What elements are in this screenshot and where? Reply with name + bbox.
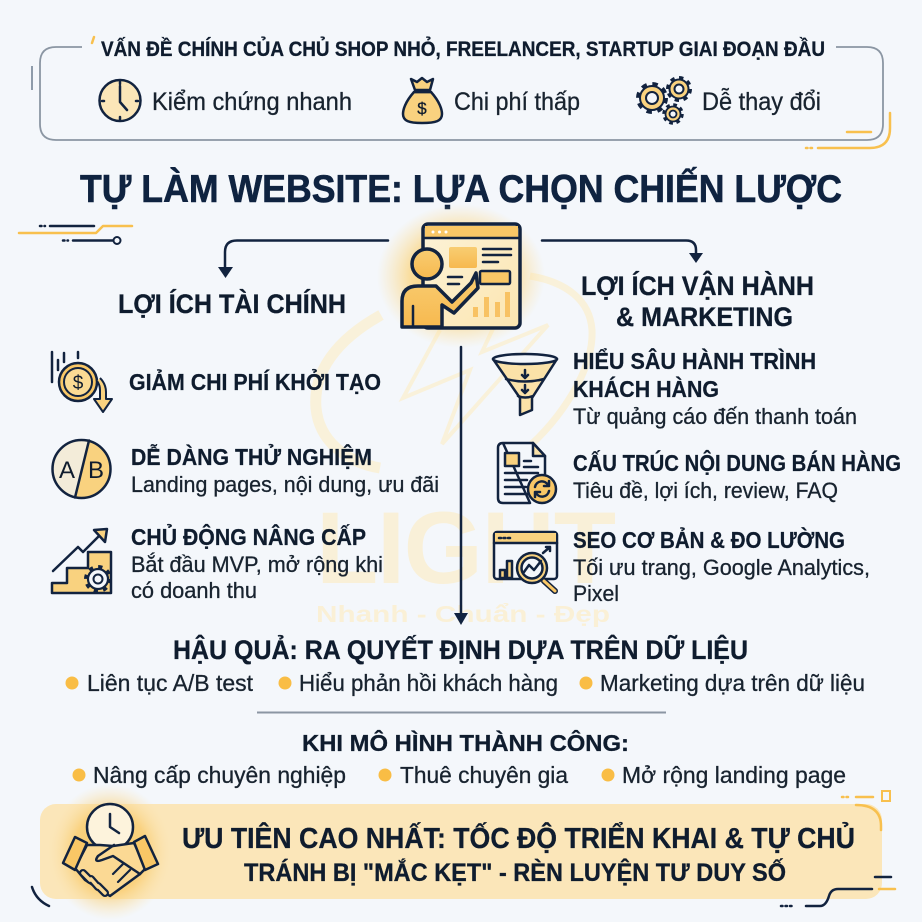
panel: financial benefits [52, 289, 439, 603]
heading: & MARKETING [616, 302, 793, 332]
label: easy to change: Dễ thay đổi [702, 87, 821, 116]
arrow: to operational benefits [542, 240, 703, 263]
consequence bullets: Marketing dựa trên dữ liệu [600, 670, 865, 696]
item: proactive upgrade: CHỦ ĐỘNG NÂNG CẤP [131, 522, 366, 550]
item: customer journey [573, 347, 857, 429]
success bullets [72, 762, 846, 788]
item: sales content structure: Tiêu đề, lợi ích, review, FAQ [573, 478, 838, 503]
icon: clock [100, 80, 140, 121]
panel: top priority banner [40, 784, 882, 920]
item: easy testing [131, 442, 439, 497]
success bullets: Mở rộng landing page [622, 762, 846, 788]
consequence bullets [66, 670, 865, 696]
icon: SEO analytics window [494, 532, 557, 591]
item: SEO and measurement: SEO CƠ BẢN & ĐO LƯỜNG [573, 525, 845, 553]
heading: LỢI ÍCH VẬN HÀNH [581, 271, 814, 301]
watermark logo: Nhanh - Chuẩn - Đẹp [316, 601, 610, 627]
panel: main problem frame [40, 37, 883, 140]
consequence bullets: Liên tục A/B test [87, 670, 254, 696]
icon: A/B test: B [88, 457, 104, 484]
item: customer journey: Từ quảng cáo đến thanh toán [573, 404, 857, 429]
icon: presenter at web window [402, 224, 520, 328]
item: sales content structure [573, 449, 901, 503]
item: customer journey: HIỂU SÂU HÀNH TRÌNH [573, 347, 816, 374]
decorative circuit lines: bottom [32, 791, 895, 906]
icon: clock and handshake [63, 804, 158, 896]
watermark logo [316, 276, 616, 627]
icon: money bag: $ [417, 99, 427, 118]
item: SEO and measurement: Pixel [573, 581, 619, 606]
icon: funnel [493, 354, 557, 415]
arrow: to financial benefits [218, 240, 388, 278]
icon: stairs, growth arrow and gear [52, 529, 111, 593]
panel: operations and marketing benefits [493, 271, 901, 606]
label: fast validation: Kiểm chứng nhanh [152, 88, 352, 116]
banner subline: TRÁNH BỊ "MẮC KẸT" - RÈN LUYỆN TƯ DUY SỐ [244, 857, 786, 887]
banner headline: ƯU TIÊN CAO NHẤT: TỐC ĐỘ TRIỂN KHAI & TỰ CHỦ [182, 822, 855, 855]
icon: coin with down arrow [52, 352, 112, 412]
item: customer journey: KHÁCH HÀNG [573, 375, 719, 402]
item: easy testing: DỄ DÀNG THỬ NGHIỆM [131, 442, 372, 470]
item: proactive upgrade [131, 522, 383, 603]
item: SEO and measurement [573, 525, 870, 606]
label: low cost: Chi phí thấp [454, 88, 580, 116]
item: proactive upgrade: có doanh thu [131, 578, 257, 603]
icon: A/B test: A [59, 457, 75, 484]
center glow [377, 204, 545, 348]
icon: gears [639, 78, 690, 122]
success bullets: Thuê chuyên gia [400, 762, 568, 788]
heading [581, 271, 814, 332]
item: proactive upgrade: Bắt đầu MVP, mở rộng khi [131, 552, 383, 577]
icon: document with refresh [498, 443, 556, 503]
arrow: down to consequence [454, 347, 468, 625]
consequence heading: HẬU QUẢ: RA QUYẾT ĐỊNH DỰA TRÊN DỮ LIỆU [173, 633, 748, 665]
success heading: KHI MÔ HÌNH THÀNH CÔNG: [302, 729, 629, 756]
icon: money bag [403, 78, 442, 123]
decorative circuit lines: left [19, 226, 132, 244]
icon: A/B test [52, 440, 111, 498]
success bullets: Nâng cấp chuyên nghiệp [93, 762, 346, 788]
watermark logo: LIGHT [316, 491, 616, 605]
main title: TỰ LÀM WEBSITE: LỰA CHỌN CHIẾN LƯỢC [80, 167, 842, 211]
decorative circuit lines: top [32, 37, 890, 148]
icon: coin with down arrow: $ [73, 373, 84, 394]
icon glow [48, 784, 172, 920]
heading: LỢI ÍCH TÀI CHÍNH [118, 289, 346, 319]
item: SEO and measurement: Tối ưu trang, Google Analytics, [573, 555, 870, 580]
item: reduce setup cost: GIẢM CHI PHÍ KHỞI TẠO [129, 367, 381, 395]
item: easy testing: Landing pages, nội dung, ưu đãi [131, 472, 439, 497]
consequence bullets: Hiểu phản hồi khách hàng [299, 670, 558, 696]
frame heading: VẤN ĐỀ CHÍNH CỦA CHỦ SHOP NHỎ, FREELANCER, STARTUP GIAI ĐOẠN ĐẦU [101, 37, 825, 61]
